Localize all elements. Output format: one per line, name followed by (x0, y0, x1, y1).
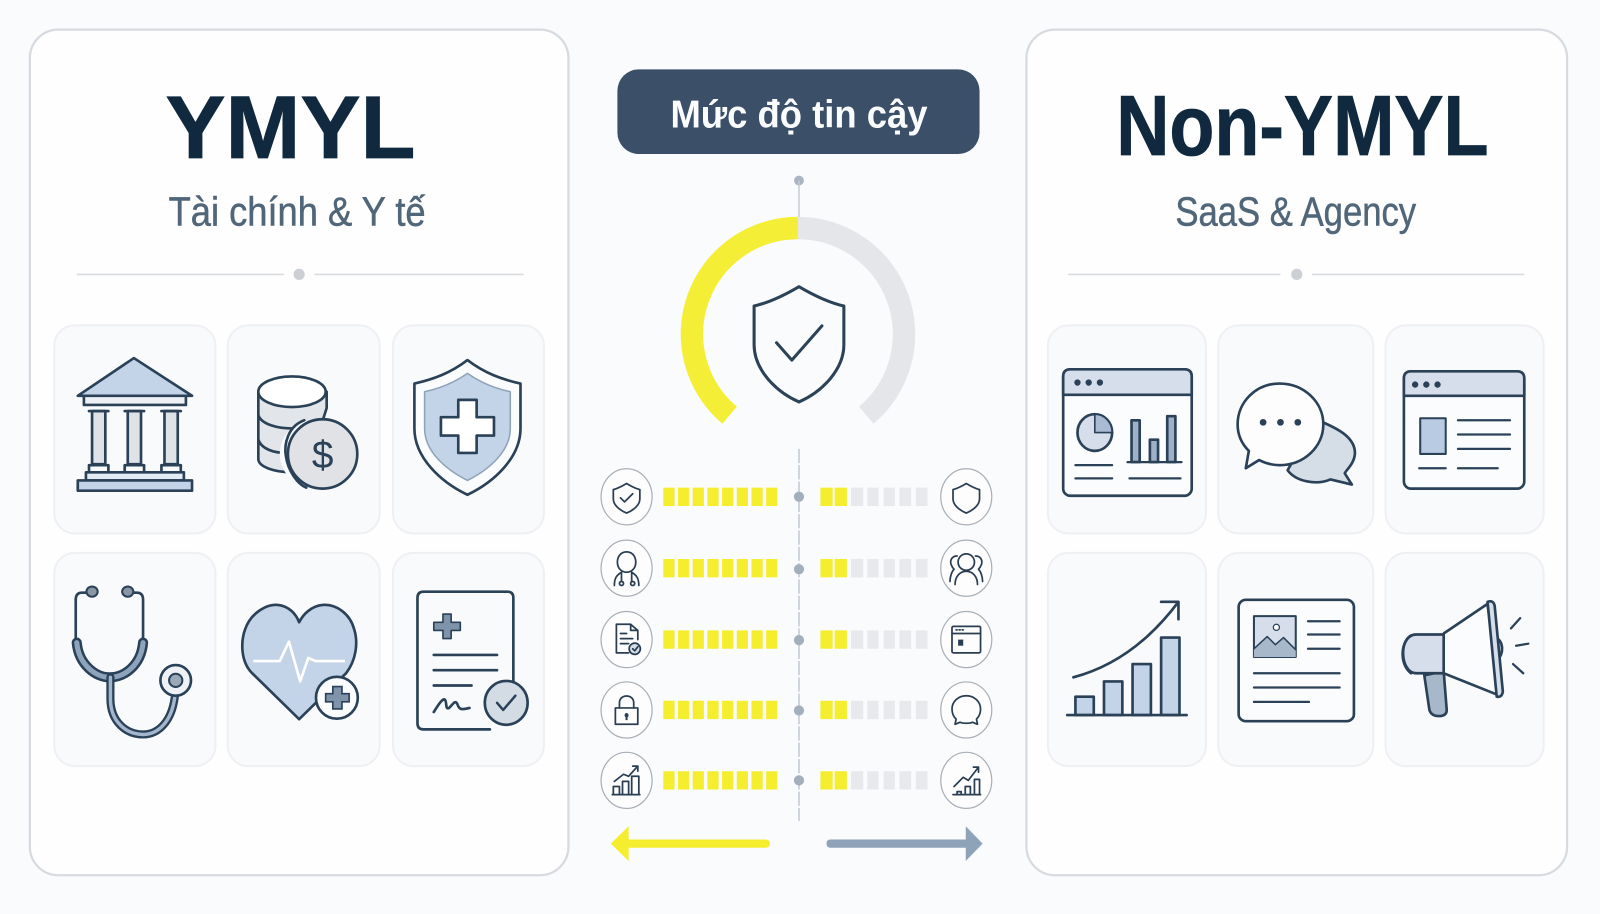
arrow: left yellow (611, 826, 770, 861)
icon: growth chart (1067, 602, 1187, 715)
icon: megaphone (1403, 601, 1528, 716)
row 3 (601, 612, 992, 668)
card: megaphone (1386, 553, 1544, 766)
card: medical document (393, 553, 544, 766)
panel: YMYL (30, 30, 568, 875)
card: dashboard (1048, 325, 1206, 534)
panel: center trust level (601, 69, 992, 861)
icon: growth small left (601, 752, 652, 808)
icon: shield check small (601, 469, 652, 525)
icon: shield with plus (414, 360, 520, 495)
icon: coin stack (258, 376, 357, 489)
card: stethoscope (54, 553, 215, 766)
icon: doctor (601, 540, 652, 596)
icon: bank (78, 358, 192, 491)
card: bank (54, 325, 215, 534)
icon: coin stack: $ (312, 434, 333, 477)
icon: growth small right (941, 752, 992, 808)
heading: Non-YMYL: Non-YMYL (1116, 78, 1489, 174)
icon: document check (601, 612, 652, 668)
icon: browser small (941, 612, 992, 668)
row 4 (601, 682, 992, 738)
icon: heart with pulse (242, 605, 358, 719)
icon: medical document (417, 592, 528, 729)
icon: shield small (941, 469, 992, 525)
heading: YMYL: YMYL (166, 78, 415, 177)
row 1 (601, 469, 992, 525)
title: Mức độ tin cậy: Mức độ tin cậy (670, 94, 928, 137)
row 2 (601, 540, 992, 596)
icon: padlock (601, 682, 652, 738)
icon: speech bubble (941, 682, 992, 738)
icon: people (941, 540, 992, 596)
card: coins (228, 325, 380, 534)
gauge (692, 228, 904, 415)
icon: chat bubbles (1238, 384, 1355, 485)
subheading: Tài chính & Y tế: Tài chính & Y tế (169, 188, 426, 234)
title pill (617, 69, 980, 154)
card: chat (1218, 325, 1373, 534)
card: browser (1386, 325, 1544, 534)
arrow: right slate (827, 826, 983, 861)
icon: stethoscope (76, 587, 191, 734)
subheading: SaaS & Agency: SaaS & Agency (1175, 188, 1417, 234)
card: medical shield (393, 325, 544, 534)
panel: Non-YMYL (1026, 30, 1567, 875)
card: heart (228, 553, 380, 766)
icon: browser window (1404, 371, 1524, 489)
icon: dashboard window (1063, 369, 1192, 496)
icon: shield check (754, 287, 844, 402)
row 5 (601, 752, 992, 808)
card: growth chart (1048, 553, 1206, 766)
card: article (1218, 553, 1373, 766)
icon: article (1239, 600, 1354, 721)
